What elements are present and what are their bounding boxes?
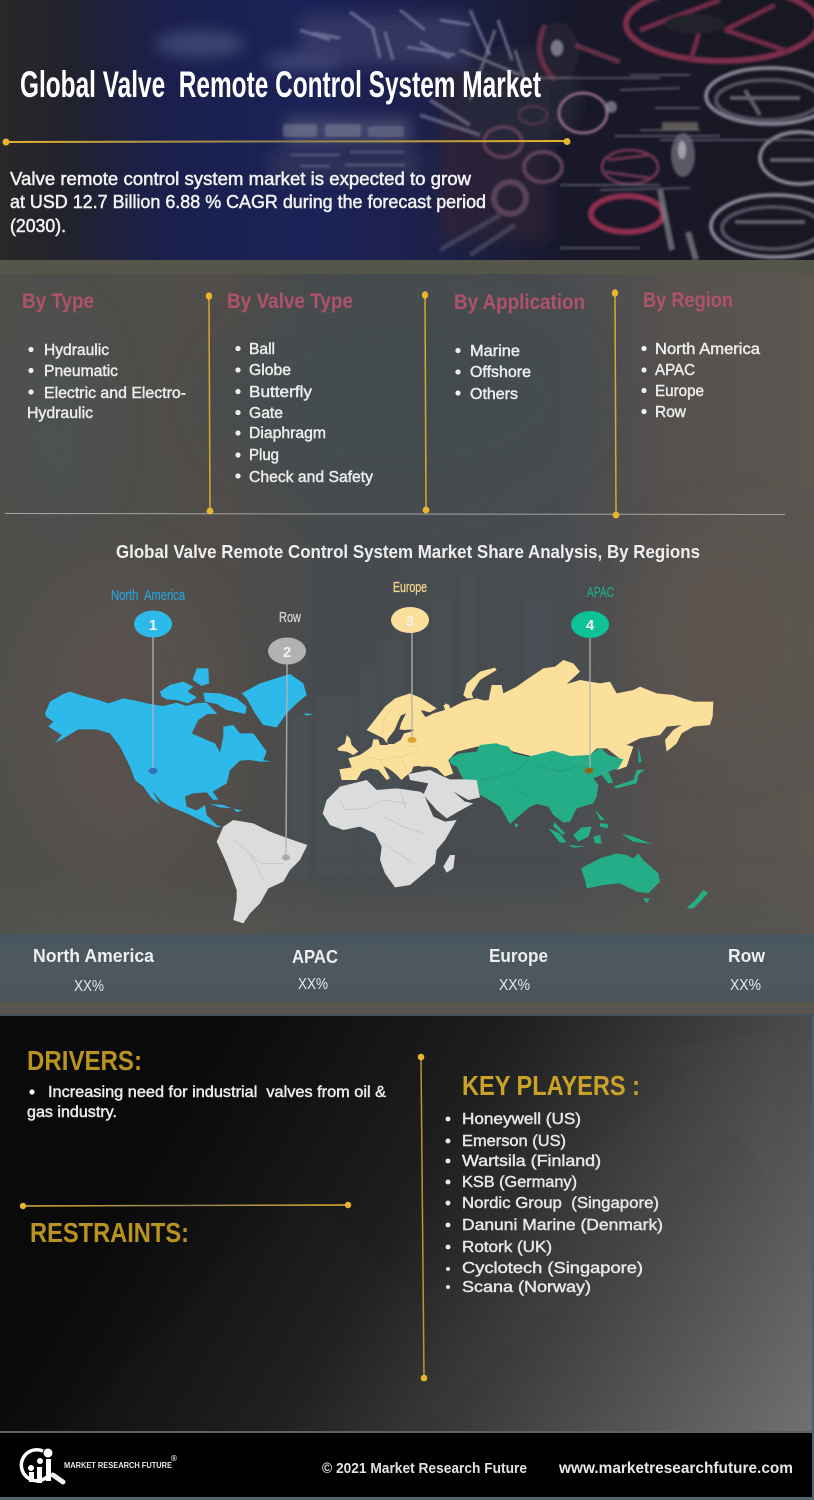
heading: restraints: RESTRAINTS: bbox=[30, 1217, 189, 1248]
list: regions: North America bbox=[655, 341, 760, 358]
panel: footer bbox=[0, 1431, 814, 1500]
driver text: Increasing need for industrial valves from oil & bbox=[48, 1084, 386, 1101]
list: valve types: Plug bbox=[249, 447, 279, 464]
stat: Row: Row bbox=[728, 946, 766, 966]
list: applications: Offshore bbox=[470, 364, 531, 381]
list: applications bbox=[455, 343, 531, 403]
list: key players: Rotork (UK) bbox=[462, 1239, 552, 1256]
chart: world map bbox=[45, 579, 713, 923]
list: type items: Pneumatic bbox=[44, 363, 118, 380]
list: regions: Europe bbox=[655, 383, 704, 400]
heading: key players: KEY PLAYERS : bbox=[462, 1070, 640, 1101]
heading: By Region: By Region bbox=[643, 289, 733, 312]
map region: Europe and Russia bbox=[337, 660, 713, 780]
stat: North America bbox=[33, 946, 155, 995]
list: key players: Nordic Group (Singapore) bbox=[462, 1195, 659, 1212]
stat: Row: XX% bbox=[730, 977, 761, 994]
panel: By Valve Type bbox=[227, 290, 373, 486]
list: valve types: Diaphragm bbox=[249, 425, 326, 442]
list: applications: Others bbox=[470, 386, 518, 403]
map pin 2: Row: Row bbox=[279, 609, 301, 626]
panel: drivers bbox=[27, 1045, 386, 1121]
list: key players bbox=[446, 1111, 663, 1296]
panel: header banner bbox=[0, 0, 814, 260]
map region: Asia Pacific bbox=[449, 743, 708, 908]
list: type items: Electric and Electro- bbox=[44, 385, 186, 402]
list: key players: Emerson (US) bbox=[462, 1133, 566, 1150]
panel: By Type bbox=[22, 290, 186, 422]
heading: By Valve Type: By Valve Type bbox=[227, 290, 353, 313]
intro text: (2030). bbox=[10, 216, 66, 236]
map pin 1: North America: 1 bbox=[149, 617, 157, 634]
copyright: © 2021 Market Research Future bbox=[322, 1460, 527, 1477]
panel: segments and map background bbox=[0, 260, 814, 945]
heading: By Type: By Type bbox=[22, 290, 94, 313]
driver text: gas industry. bbox=[27, 1104, 117, 1121]
stat: APAC: XX% bbox=[298, 976, 328, 993]
stat: North America: XX% bbox=[74, 978, 104, 995]
chart heading: Global Valve Remote Control System Market Share Analysis, By Regions bbox=[116, 542, 700, 562]
list: key players: Honeywell (US) bbox=[462, 1111, 581, 1128]
map region: Latin America, Africa and Middle East bbox=[217, 770, 480, 923]
list: key players: Scana (Norway) bbox=[462, 1279, 591, 1296]
stat: APAC: APAC bbox=[292, 947, 338, 967]
list: key players: Cyclotech (Singapore) bbox=[462, 1260, 643, 1277]
icon: Market Research Future logo bbox=[21, 1448, 177, 1483]
map pin 4: APAC: APAC bbox=[587, 584, 614, 601]
list: valve types: Ball bbox=[249, 341, 275, 358]
intro text: Valve remote control system market is expected to grow bbox=[10, 169, 472, 189]
list: valve types: Globe bbox=[249, 362, 291, 379]
stat: APAC bbox=[292, 947, 338, 993]
list: valve types bbox=[235, 341, 373, 486]
stat: Row bbox=[728, 946, 766, 994]
map pin 3: Europe bbox=[391, 579, 429, 743]
list: key players: Danuni Marine (Denmark) bbox=[462, 1217, 663, 1234]
intro text bbox=[10, 169, 486, 236]
list: type items: Hydraulic bbox=[27, 405, 93, 422]
machinery photo backdrop bbox=[155, 0, 814, 260]
list: regions: Row bbox=[655, 404, 686, 421]
list: regions bbox=[641, 341, 760, 421]
heading: drivers: DRIVERS: bbox=[27, 1045, 142, 1076]
panel: regional share band bbox=[0, 934, 814, 1016]
heading: By Application: By Application bbox=[454, 291, 585, 314]
list: type items: Hydraulic bbox=[44, 342, 109, 359]
list: valve types: Gate bbox=[249, 405, 283, 422]
icon: Market Research Future logo: ® bbox=[171, 1454, 177, 1463]
list: type items bbox=[27, 342, 186, 422]
list: key players: KSB (Germany) bbox=[462, 1174, 577, 1191]
stat: North America: North America bbox=[33, 946, 155, 966]
list: key players: Wartsila (Finland) bbox=[462, 1153, 601, 1170]
map pin 1: North America bbox=[111, 587, 185, 774]
stat: Europe bbox=[489, 946, 548, 994]
panel: By Application bbox=[454, 291, 585, 403]
map region: North America bbox=[45, 668, 313, 827]
map pin 2: Row: 2 bbox=[283, 644, 291, 661]
map pin 2: Row bbox=[268, 609, 306, 860]
list: regions: APAC bbox=[655, 362, 695, 379]
map pin 4: APAC bbox=[571, 584, 614, 774]
panel: By Region bbox=[641, 289, 760, 421]
list: applications: Marine bbox=[470, 343, 520, 360]
panel: drivers, restraints and key players background bbox=[0, 1016, 814, 1432]
driver text bbox=[27, 1084, 386, 1121]
title: Global Valve Remote Control System Market bbox=[20, 64, 541, 105]
map pin 1: North America: North America bbox=[111, 587, 185, 604]
map pin 4: APAC: 4 bbox=[586, 617, 595, 634]
website: www.marketresearchfuture.com bbox=[558, 1460, 793, 1477]
gold divider line bbox=[2, 138, 570, 146]
list: valve types: Butterfly bbox=[249, 384, 312, 401]
icon: Market Research Future logo: MARKET RESEARCH FUTURE bbox=[64, 1461, 173, 1470]
map pin 3: Europe: 3 bbox=[406, 613, 414, 630]
map pin 3: Europe: Europe bbox=[393, 579, 427, 596]
stat: Europe: Europe bbox=[489, 946, 548, 966]
list: valve types: Check and Safety bbox=[249, 469, 373, 486]
intro text: at USD 12.7 Billion 6.88 % CAGR during the forecast period bbox=[10, 192, 486, 212]
panel: key players bbox=[446, 1070, 663, 1296]
stat: Europe: XX% bbox=[499, 977, 530, 994]
